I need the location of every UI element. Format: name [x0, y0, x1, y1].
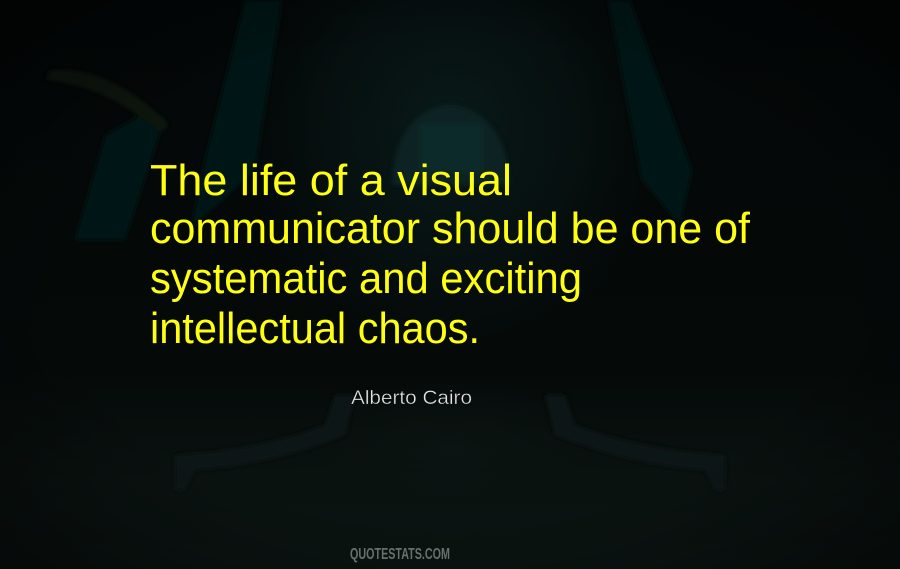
- right pillars: [608, 0, 692, 225]
- author attribution: Alberto Cairo: [351, 388, 472, 409]
- right balustrade: [545, 395, 725, 490]
- quote line 2: communicator should be one of: [150, 204, 751, 253]
- quote line 4: intellectual chaos.: [150, 304, 480, 353]
- quote text: [150, 156, 751, 353]
- left arch: [45, 70, 170, 132]
- quote line 1: The life of a visual: [150, 156, 512, 205]
- quote line 3: systematic and exciting: [150, 254, 582, 303]
- left balustrade: [175, 395, 355, 490]
- left pillars: [75, 110, 165, 240]
- watermark: quotestats.com: QUOTESTATS.COM: [350, 546, 450, 563]
- central dome: [392, 104, 510, 185]
